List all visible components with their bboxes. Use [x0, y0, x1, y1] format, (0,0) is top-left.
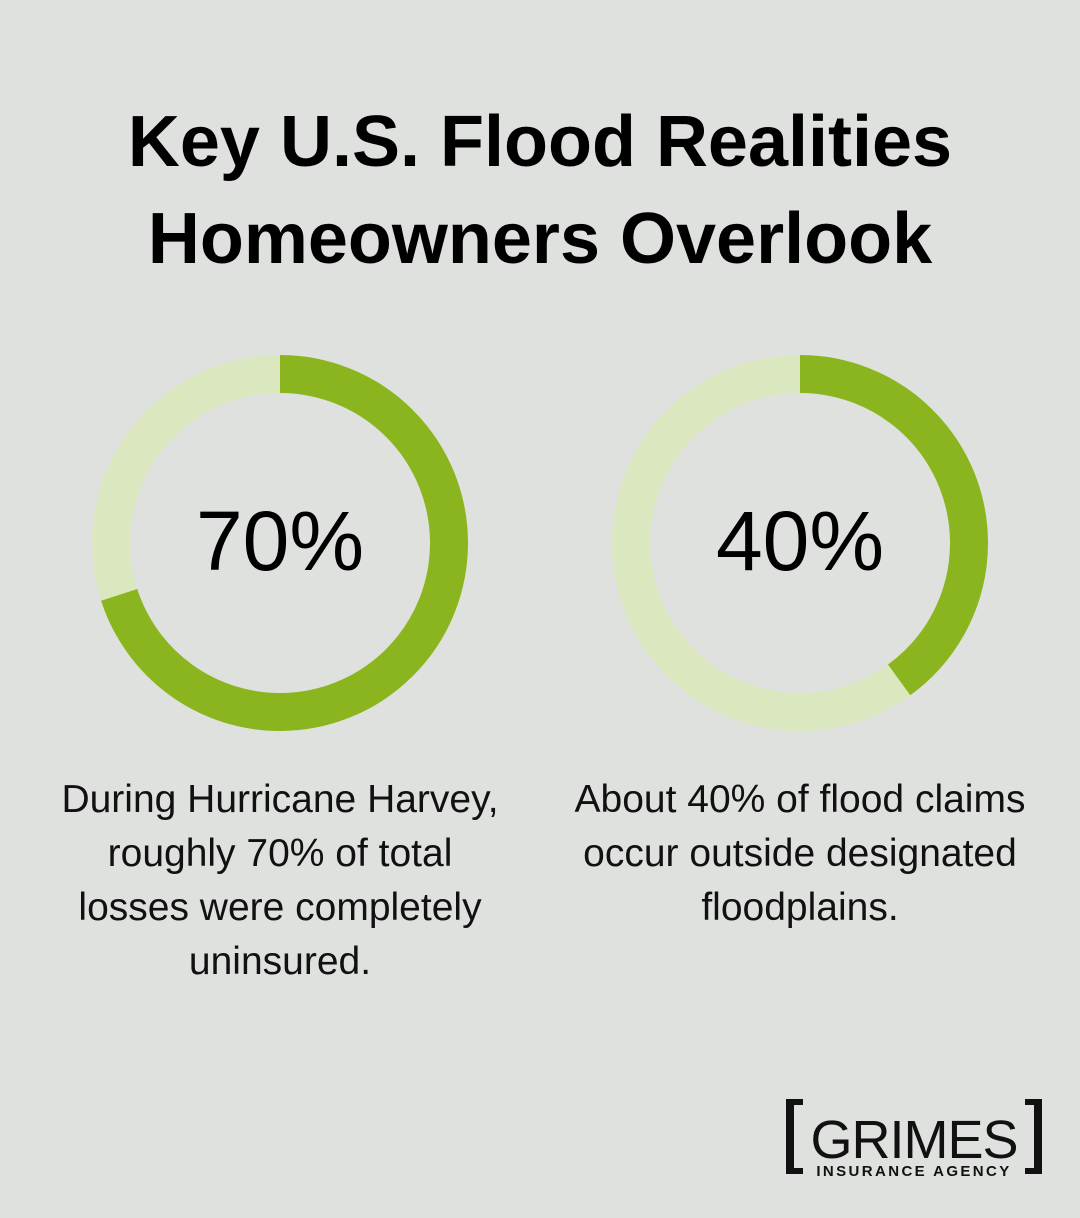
text: Harvey: roughly 70% of total [108, 832, 452, 875]
text: floodplains: occur outside designated [583, 832, 1017, 875]
donut charts [92, 355, 988, 731]
donut: 70%: 70% [196, 494, 364, 588]
title: Key U.S. Flood Realities [128, 102, 952, 182]
donut: 40%: 40% [716, 494, 884, 588]
text: Harvey: During Hurricane Harvey, [61, 778, 499, 821]
text: floodplains: About 40% of flood claims [575, 778, 1025, 821]
logo: INSURANCE AGENCY [816, 1163, 1012, 1180]
logo [786, 1099, 1042, 1180]
donut: 70% [111, 374, 449, 712]
text: floodplains [574, 778, 1025, 929]
text: Harvey [61, 778, 499, 983]
text: Harvey: uninsured. [189, 940, 371, 983]
title [128, 102, 952, 279]
donut: 40% [631, 374, 969, 712]
text: floodplains: floodplains. [701, 886, 899, 929]
title: Homeowners Overlook [148, 199, 932, 279]
text: Harvey: losses were completely [78, 886, 482, 929]
logo: GRIMES [810, 1110, 1018, 1170]
